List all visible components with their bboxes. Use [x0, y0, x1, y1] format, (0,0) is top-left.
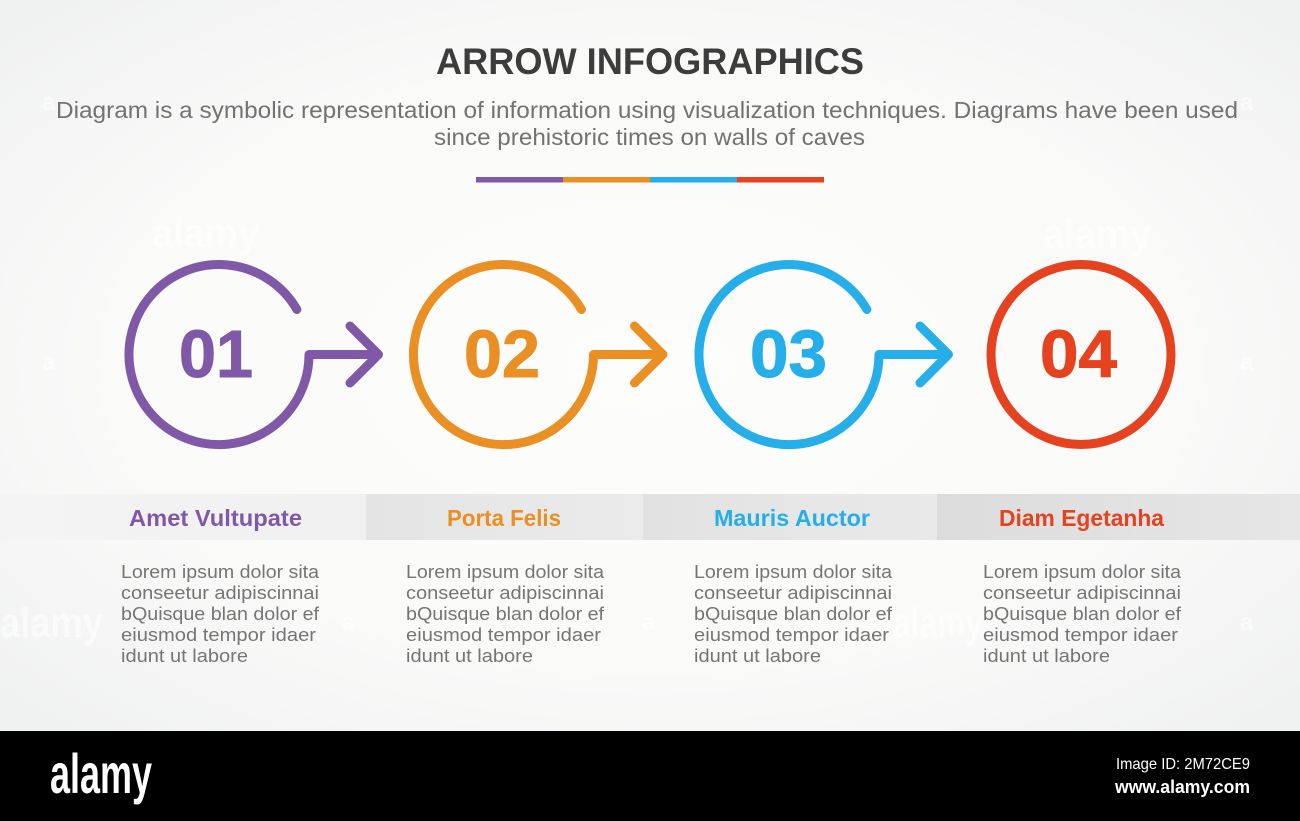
number 01: 01	[179, 317, 253, 392]
text block 02: conseetur adipiscinnai	[406, 583, 604, 603]
label band	[0, 494, 1300, 540]
title divider: four colour bar	[476, 177, 824, 182]
text block 03	[694, 562, 893, 666]
watermarks: alamy	[1043, 210, 1152, 257]
heading: Diam Egetanha: Diam Egetanha	[999, 505, 1164, 531]
text block 04: conseetur adipiscinnai	[983, 583, 1181, 603]
text block 01	[121, 562, 320, 666]
icon: circle arrow 01	[129, 265, 378, 445]
icon: circle 04	[991, 264, 1171, 444]
step 02	[406, 265, 663, 666]
step 01	[121, 265, 378, 666]
heading: Porta Felis: Porta Felis	[447, 505, 561, 531]
text block 03: idunt ut labore	[694, 646, 821, 666]
number 02: 02	[464, 317, 540, 392]
watermarks	[0, 89, 1254, 646]
text block 03: Lorem ipsum dolor sita	[694, 562, 893, 582]
text block 01: eiusmod tempor idaer	[121, 625, 316, 645]
watermarks: a	[642, 609, 656, 636]
subtitle	[56, 97, 1238, 150]
subtitle: since prehistoric times on walls of caves	[434, 124, 865, 150]
watermarks: a	[1240, 89, 1254, 116]
title: ARROW INFOGRAPHICS	[436, 41, 864, 82]
watermarks: alamy	[0, 599, 104, 646]
text block 01: Lorem ipsum dolor sita	[121, 562, 320, 582]
heading: Amet Vultupate: Amet Vultupate	[129, 505, 302, 531]
number 03: 03	[750, 317, 827, 392]
website: www.alamy.com	[1114, 777, 1250, 797]
text block 03: conseetur adipiscinnai	[694, 583, 892, 603]
text block 04: bQuisque blan dolor ef	[983, 604, 1182, 624]
watermarks: a	[341, 609, 355, 636]
text block 03: eiusmod tempor idaer	[694, 625, 889, 645]
footer logo: alamy	[50, 742, 152, 805]
watermarks: alamy	[893, 599, 983, 646]
icon: circle arrow 03	[699, 265, 948, 445]
text block 02	[406, 562, 605, 666]
watermarks: a	[1240, 349, 1254, 376]
text block 02: eiusmod tempor idaer	[406, 625, 601, 645]
subtitle: Diagram is a symbolic representation of information using visualization techniques. Diagrams have been used	[56, 97, 1238, 123]
footer bar	[0, 731, 1300, 821]
text block 02: idunt ut labore	[406, 646, 533, 666]
step 04	[983, 264, 1182, 666]
icon: circle arrow 02	[414, 265, 663, 445]
text block 01: idunt ut labore	[121, 646, 248, 666]
image id: Image ID: 2M72CE9	[1116, 756, 1250, 773]
heading: Mauris Auctor: Mauris Auctor	[714, 505, 870, 531]
watermarks: alamy	[152, 209, 260, 256]
text block 02: Lorem ipsum dolor sita	[406, 562, 605, 582]
text block 03: bQuisque blan dolor ef	[694, 604, 893, 624]
text block 01: conseetur adipiscinnai	[121, 583, 319, 603]
text block 04: Lorem ipsum dolor sita	[983, 562, 1182, 582]
text block 04: idunt ut labore	[983, 646, 1110, 666]
number 04: 04	[1040, 317, 1117, 392]
text block 02: bQuisque blan dolor ef	[406, 604, 605, 624]
text block 04	[983, 562, 1182, 666]
watermarks: a	[42, 89, 56, 116]
text block 01: bQuisque blan dolor ef	[121, 604, 320, 624]
watermarks: a	[1240, 609, 1254, 636]
step 03	[694, 265, 948, 666]
text block 04: eiusmod tempor idaer	[983, 625, 1178, 645]
watermarks: a	[42, 349, 56, 376]
